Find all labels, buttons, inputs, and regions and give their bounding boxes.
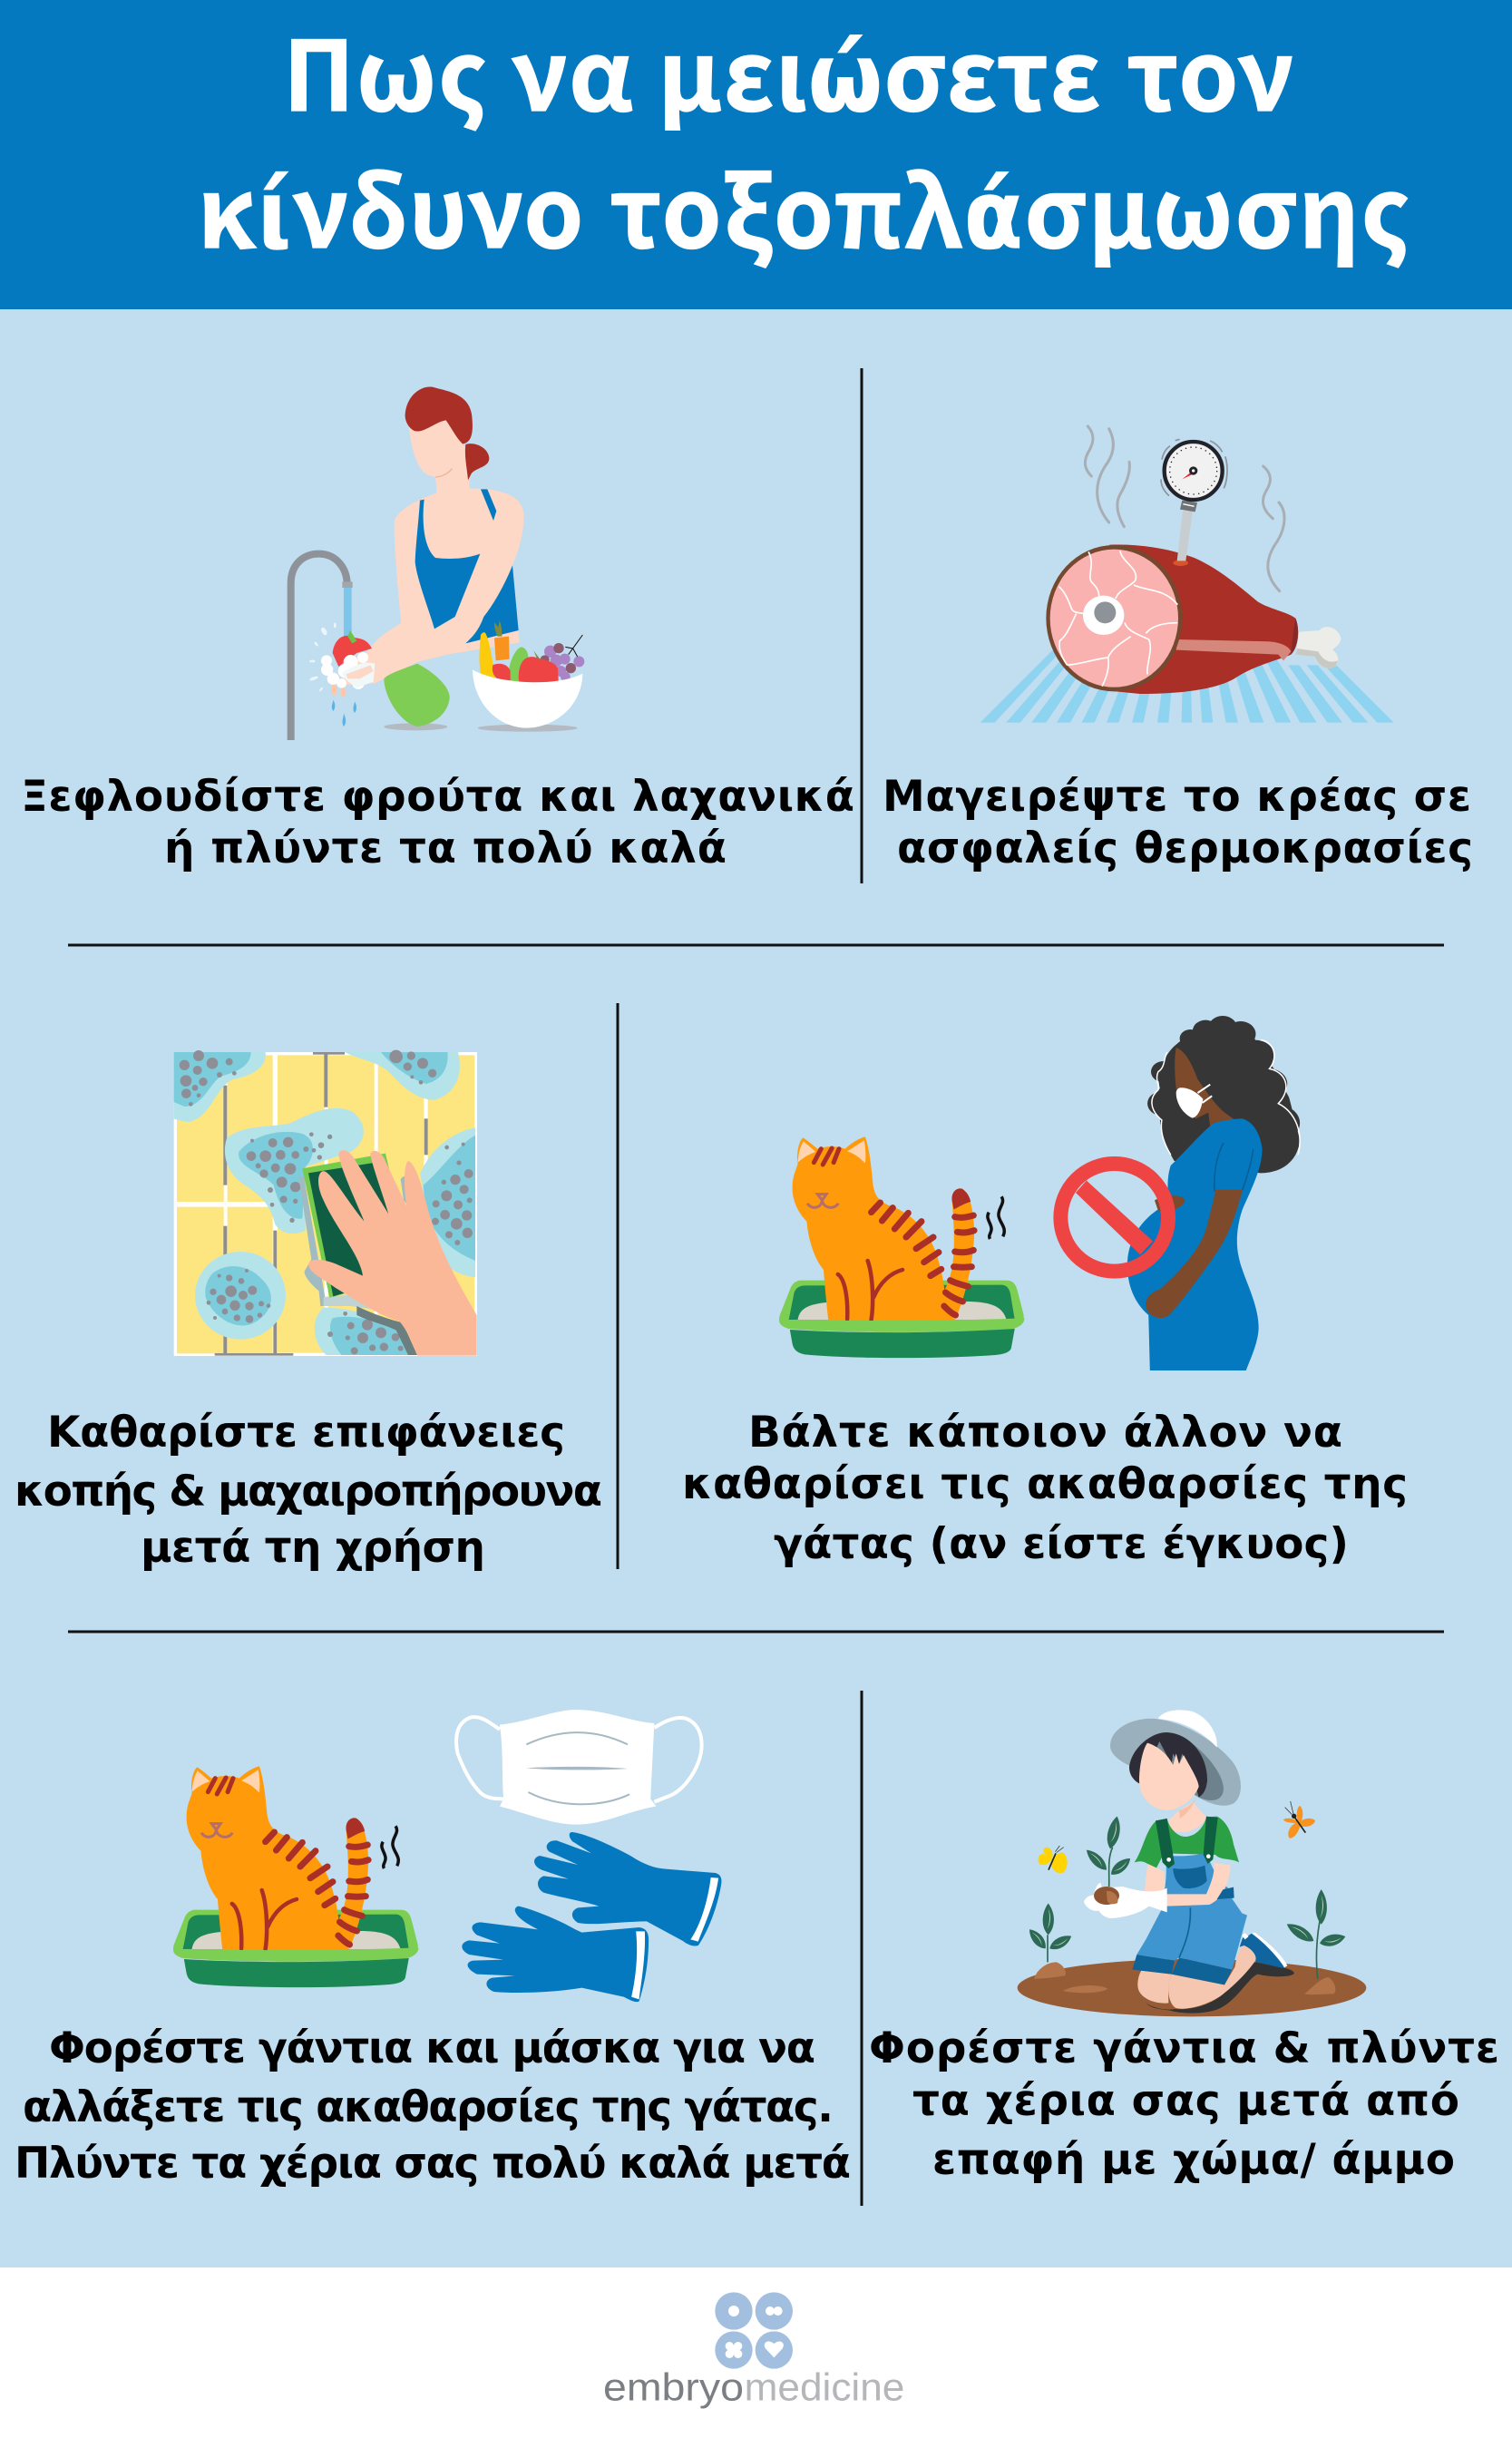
text block: wash fruit and vegetables (21, 772, 854, 873)
text block: clean surfaces (15, 1408, 602, 1573)
icon: second cat in litter box (173, 1766, 418, 1987)
text block: gloves and mask: αλλάξετε τις ακαθαρσίες της γάτας. (23, 2082, 834, 2132)
text block: clean surfaces: Καθαρίστε επιφάνειες (47, 1408, 565, 1458)
text block: clean surfaces: κοπής & μαχαιροπήρουνα (15, 1467, 602, 1516)
title: Πως να μειώσετε τον (283, 0, 1293, 139)
text block: cook meat (883, 772, 1473, 873)
text block: gardening: Φορέστε γάντια & πλύντε (869, 2024, 1499, 2073)
icon: woman washing fruit (291, 387, 584, 740)
text block: gardening (869, 2024, 1499, 2185)
text block: gloves and mask (15, 2024, 851, 2189)
gardener lower body (1137, 1933, 1294, 2014)
footer panel (0, 2268, 1512, 2438)
title: κίνδυνο τοξοπλάσμωσης (198, 136, 1410, 276)
text block: someone else cleans litter: γάτας (αν είστε έγκυος) (774, 1519, 1349, 1569)
text block: gardening: τα χέρια σας μετά από (912, 2076, 1459, 2126)
icon: pregnant woman with mask (1060, 1016, 1300, 1370)
icon: blue rubber gloves (462, 1832, 721, 2002)
icon: cat in litter box (779, 1136, 1024, 1358)
logo: embryomedicine: medicine (745, 2366, 904, 2410)
title (198, 0, 1410, 276)
text block: someone else cleans litter (682, 1408, 1408, 1569)
text block: wash fruit and vegetables: ή πλύντε τα πολύ καλά (164, 824, 727, 873)
text block: gloves and mask: Πλύντε τα χέρια σας πολύ καλά μετά (15, 2139, 851, 2189)
text block: cook meat: Μαγειρέψτε το κρέας σε (883, 772, 1471, 822)
icon: hand cleaning moldy tiles with sponge (174, 1050, 477, 1356)
text block: cook meat: ασφαλείς θερμοκρασίες (897, 824, 1473, 873)
text block: someone else cleans litter: καθαρίσει τις ακαθαρσίες της (682, 1459, 1408, 1509)
icon: surgical mask (456, 1710, 702, 1825)
text block: wash fruit and vegetables: Ξεφλουδίστε φρούτα και λαχανικά (21, 772, 854, 822)
text block: gloves and mask: Φορέστε γάντια και μάσκα για να (49, 2024, 815, 2073)
icon: prohibition sign (1060, 1164, 1168, 1272)
text block: clean surfaces: μετά τη χρήση (141, 1523, 485, 1573)
text block: someone else cleans litter: Βάλτε κάποιον άλλον να (748, 1408, 1342, 1458)
logo: embryomedicine (603, 2292, 904, 2410)
icon: ham with meat thermometer (980, 426, 1394, 723)
logo: embryomedicine: embryo (603, 2366, 744, 2410)
icon: gardener planting seedling (1018, 1710, 1366, 2016)
text block: gardening: επαφή με χώμα/ άμμο (932, 2135, 1455, 2185)
header banner (0, 0, 1512, 309)
